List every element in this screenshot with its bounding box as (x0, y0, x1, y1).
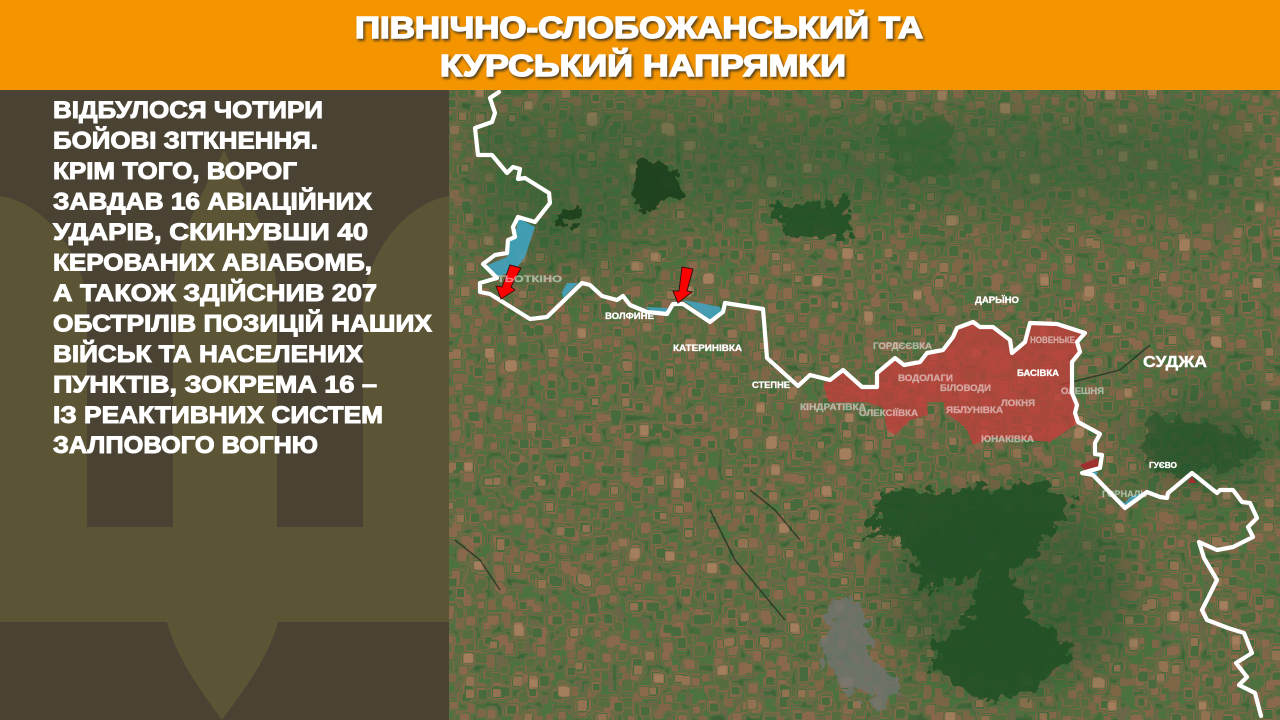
map labels: settlements: НОВЕНЬКЕ (1030, 335, 1075, 345)
arrow: attack 1 (496, 265, 521, 299)
map labels: settlements: ДАРЬЇНО (975, 295, 1019, 305)
text block: battle summary: КЕРОВАНИХ АВІАБОМБ, (53, 250, 372, 276)
icon: trident background emblem (0, 150, 450, 720)
arrow: attack 2 (673, 267, 693, 303)
title: КУРСЬКИЙ НАПРЯМКИ (440, 47, 846, 83)
text block: battle summary: ІЗ РЕАКТИВНИХ СИСТЕМ (53, 402, 383, 429)
map labels: settlements: БІЛОВОДИ (940, 383, 991, 393)
map terrain: fields mosaic (449, 90, 1280, 720)
text block: battle summary: УДАРІВ, СКИНУВШИ 40 (53, 219, 368, 246)
occupied area: small red zones (1080, 458, 1197, 483)
text block: battle summary: ОБСТРІЛІВ ПОЗИЦІЙ НАШИХ (53, 310, 432, 338)
panel: satellite map (449, 90, 1280, 720)
map labels: settlements: БАСІВКА (1017, 368, 1060, 378)
map labels: settlements: ОЛЕКСІЇВКА (859, 408, 919, 418)
text block: battle summary: ЗАЛПОВОГО ВОГНЮ (53, 432, 318, 459)
map labels: settlements: КАТЕРИНІВКА (673, 343, 743, 353)
map labels: settlements: ЮНАКІВКА (981, 434, 1035, 444)
occupied area: main red zone (823, 322, 1085, 445)
map labels: settlements: ЯБЛУНІВКА (946, 405, 1004, 415)
map terrain: rivers (455, 345, 1150, 620)
map labels: settlements: СУДЖА (1143, 354, 1207, 371)
map labels: settlements: ЛОКНЯ (1001, 398, 1035, 408)
map labels: settlements: ГУЄВО (1149, 461, 1177, 470)
text block: battle summary: ПУНКТІВ, ЗОКРЕМА 16 – (53, 372, 377, 398)
map labels: settlements: СТЕПНЕ (752, 380, 790, 390)
map labels: settlements: ВОДОЛАГИ (898, 373, 953, 383)
text block: battle summary: ВІДБУЛОСЯ ЧОТИРИ (53, 97, 323, 124)
map labels: settlements: ВОЛФИНЕ (605, 311, 654, 321)
map labels: settlements: КІНДРАТІВКА (800, 402, 867, 412)
text block: battle summary (53, 97, 432, 459)
map labels: settlements: ГОРНАЛЬ (1102, 489, 1148, 499)
text block: battle summary: БОЙОВІ ЗІТКНЕННЯ. (53, 126, 318, 154)
border line (475, 92, 1261, 716)
map labels: settlements (497, 274, 1207, 499)
title (355, 9, 923, 83)
text block: battle summary: КРІМ ТОГО, ВОРОГ (53, 158, 297, 185)
map terrain: city (822, 598, 905, 705)
header banner (0, 0, 1280, 90)
text block: battle summary: ВІЙСЬК ТА НАСЕЛЕНИХ (53, 340, 363, 368)
advance areas: blue zones (488, 218, 1147, 507)
text block: battle summary: А ТАКОЖ ЗДІЙСНИВ 207 (53, 279, 377, 307)
map terrain: forests (555, 115, 1265, 700)
map labels: settlements: ТЬОТКІНО (497, 274, 562, 284)
map labels: settlements: ГОРДЄЄВКА (873, 341, 933, 351)
map labels: settlements: ОЛЕШНЯ (1061, 386, 1104, 396)
panel: left text panel (0, 90, 450, 720)
map terrain: regional tone (470, 110, 1280, 690)
text block: battle summary: ЗАВДАВ 16 АВІАЦІЙНИХ (53, 188, 372, 216)
title: ПІВНІЧНО-СЛОБОЖАНСЬКИЙ ТА (355, 9, 923, 45)
